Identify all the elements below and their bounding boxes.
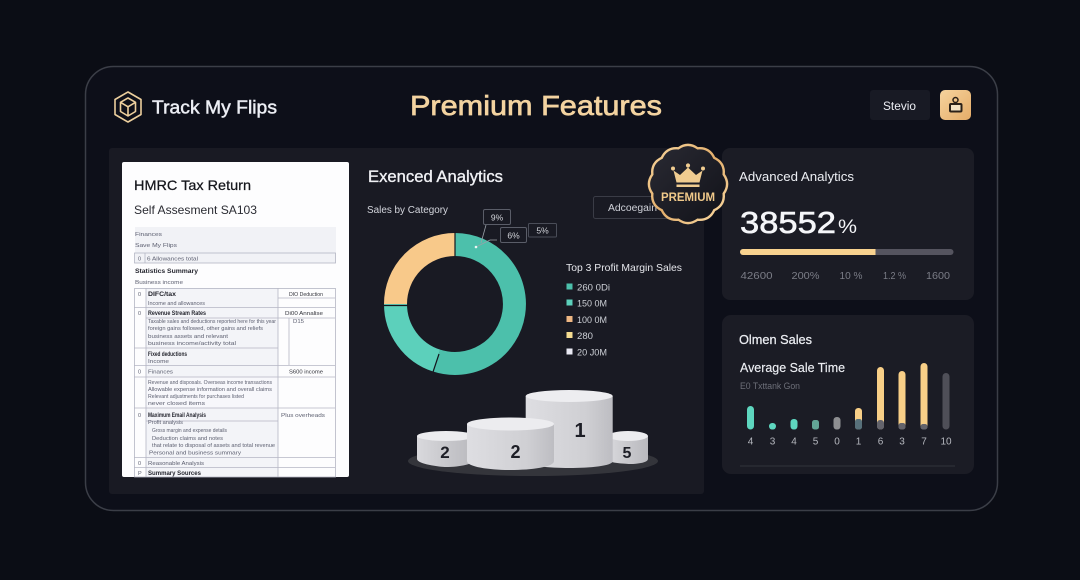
segment: orange	[396, 244, 455, 304]
document subheading: Self Assesment SA103	[134, 203, 257, 217]
scale labels: 1.2 %	[883, 271, 906, 282]
icon: user button	[940, 90, 971, 120]
user name button: Stevio	[883, 101, 916, 113]
scale labels: 200%	[792, 271, 820, 282]
step: left: 2	[440, 443, 450, 462]
panel: main	[109, 148, 704, 494]
legend heading: Top 3 Profit Margin Sales	[566, 262, 682, 274]
form table: DIFC/tax	[148, 291, 177, 298]
bar labels: 1	[856, 436, 862, 448]
step: second place: 2	[510, 442, 521, 462]
podium	[408, 390, 658, 476]
logo	[115, 92, 277, 122]
document heading: HMRC Tax Return	[134, 177, 251, 193]
form table: foreign gains followed, other gains and reliefs	[148, 326, 263, 332]
form table: 0	[138, 461, 141, 467]
form table: Plus overheads	[281, 413, 325, 419]
bar labels: 10	[940, 436, 952, 448]
form section heading: Statistics Summary	[135, 268, 199, 275]
legend: 260 0Di	[577, 282, 610, 294]
legend	[566, 262, 682, 358]
step: right: 5	[623, 445, 632, 462]
callout: 5%: 5%	[536, 226, 549, 236]
podium shadow	[408, 446, 658, 476]
form table: Summary Sources	[148, 470, 202, 477]
donut chart	[384, 232, 514, 372]
form table: business assets and relevant	[148, 334, 229, 340]
progress bar	[740, 249, 954, 255]
scale labels: 10 %	[840, 271, 863, 282]
form header band: Finances	[135, 232, 162, 238]
segment: teal light	[396, 304, 437, 361]
bar labels: 7	[921, 436, 927, 448]
form table: D15	[293, 319, 304, 325]
bar labels: 3	[770, 436, 776, 448]
dropdown	[594, 196, 674, 218]
icon: hexagon box	[115, 92, 141, 122]
form header band: 6 Allowances total	[147, 256, 198, 262]
form table: Relevant adjustments for purchases listed	[148, 394, 244, 400]
chart label: Sales by Category	[367, 205, 448, 216]
form table: 0	[138, 311, 141, 317]
big metric: %	[838, 217, 857, 238]
chart note: E0 Txttank Gon	[740, 381, 800, 392]
card heading: Advanced Analytics	[739, 169, 855, 184]
bar labels: 6	[878, 436, 884, 448]
form table: Income and allowances	[148, 301, 205, 307]
bar labels: 0	[834, 436, 840, 448]
card heading: Olmen Sales	[739, 332, 812, 347]
panel: HMRC tax return document	[122, 162, 349, 477]
callout: 6%: 6%	[507, 230, 520, 240]
bar labels: 4	[748, 436, 754, 448]
form table: Taxable sales and deductions reported here for this year	[148, 319, 276, 325]
form table: business income/activity total	[148, 341, 236, 347]
form table: 0	[138, 292, 141, 298]
form header band	[134, 227, 336, 263]
form section note: Business income	[135, 280, 183, 286]
form table: Revenue and disposals. Overseas income transactions	[148, 380, 272, 386]
form table: 0	[138, 413, 141, 419]
bar labels: 5	[813, 436, 819, 448]
form table: Allowable expense information and overall claims	[148, 387, 272, 393]
legend: 280	[577, 331, 593, 342]
scale labels: 1600	[926, 271, 950, 282]
form table: Personal and business summary	[149, 450, 241, 456]
form table: 0	[138, 370, 141, 376]
dropdown: Adcoegain	[608, 203, 657, 214]
user name button	[870, 90, 930, 120]
bar labels: 3	[899, 436, 905, 448]
form table: Gross margin and expense details	[152, 428, 227, 434]
donut callouts	[475, 210, 556, 248]
step: right	[608, 431, 648, 464]
form table: Reasonable Analysis	[148, 461, 204, 467]
form table: Deduction claims and notes	[152, 436, 223, 442]
bar chart	[747, 363, 950, 430]
analytics heading: Exenced Analytics	[368, 167, 503, 186]
panel: sales bars	[722, 315, 974, 474]
bar labels	[748, 436, 952, 448]
legend: 20 J0M	[577, 348, 607, 358]
form table: never closed items	[148, 401, 205, 407]
scale labels: 42600	[740, 271, 773, 282]
form table: Di00 Annalise	[285, 311, 323, 317]
callout: 9%: 9%	[491, 212, 504, 222]
panel: advanced analytics	[722, 148, 974, 300]
form table: Finances	[148, 370, 173, 376]
form table: S600 income	[289, 370, 323, 376]
form header band: Save My Flips	[135, 243, 177, 249]
badge label: PREMIUM	[661, 190, 715, 204]
step: first place: 1	[574, 420, 586, 442]
icon: crown	[671, 163, 705, 187]
form table: Fixed deductions	[148, 351, 187, 358]
bar labels: 4	[791, 436, 797, 448]
premium badge	[649, 145, 727, 223]
form table: P	[138, 471, 142, 477]
form header band: 0	[138, 256, 141, 262]
form table: DIO Deduction	[289, 292, 323, 298]
step: left	[417, 431, 475, 467]
segment: teal large	[437, 244, 514, 363]
step: second place	[467, 418, 554, 470]
step: first place	[526, 390, 613, 468]
legend: 150 0M	[577, 298, 607, 310]
scale labels	[740, 271, 950, 282]
segment dividers	[384, 232, 455, 372]
form table: Profit analysis	[148, 420, 183, 426]
form table: Income	[148, 359, 169, 365]
legend: 100 0M	[577, 315, 607, 326]
big metric: 38552	[740, 205, 836, 240]
title: Premium Features	[410, 90, 662, 121]
form table	[134, 288, 336, 477]
outer frame	[86, 66, 998, 510]
form table: Maximum Email Analysis	[148, 412, 206, 419]
chart heading: Average Sale Time	[740, 360, 845, 375]
brand name: Track My Flips	[152, 98, 277, 118]
form table: Revenue Stream Rates	[148, 310, 206, 317]
form table: that relate to disposal of assets and total revenue	[152, 443, 275, 449]
